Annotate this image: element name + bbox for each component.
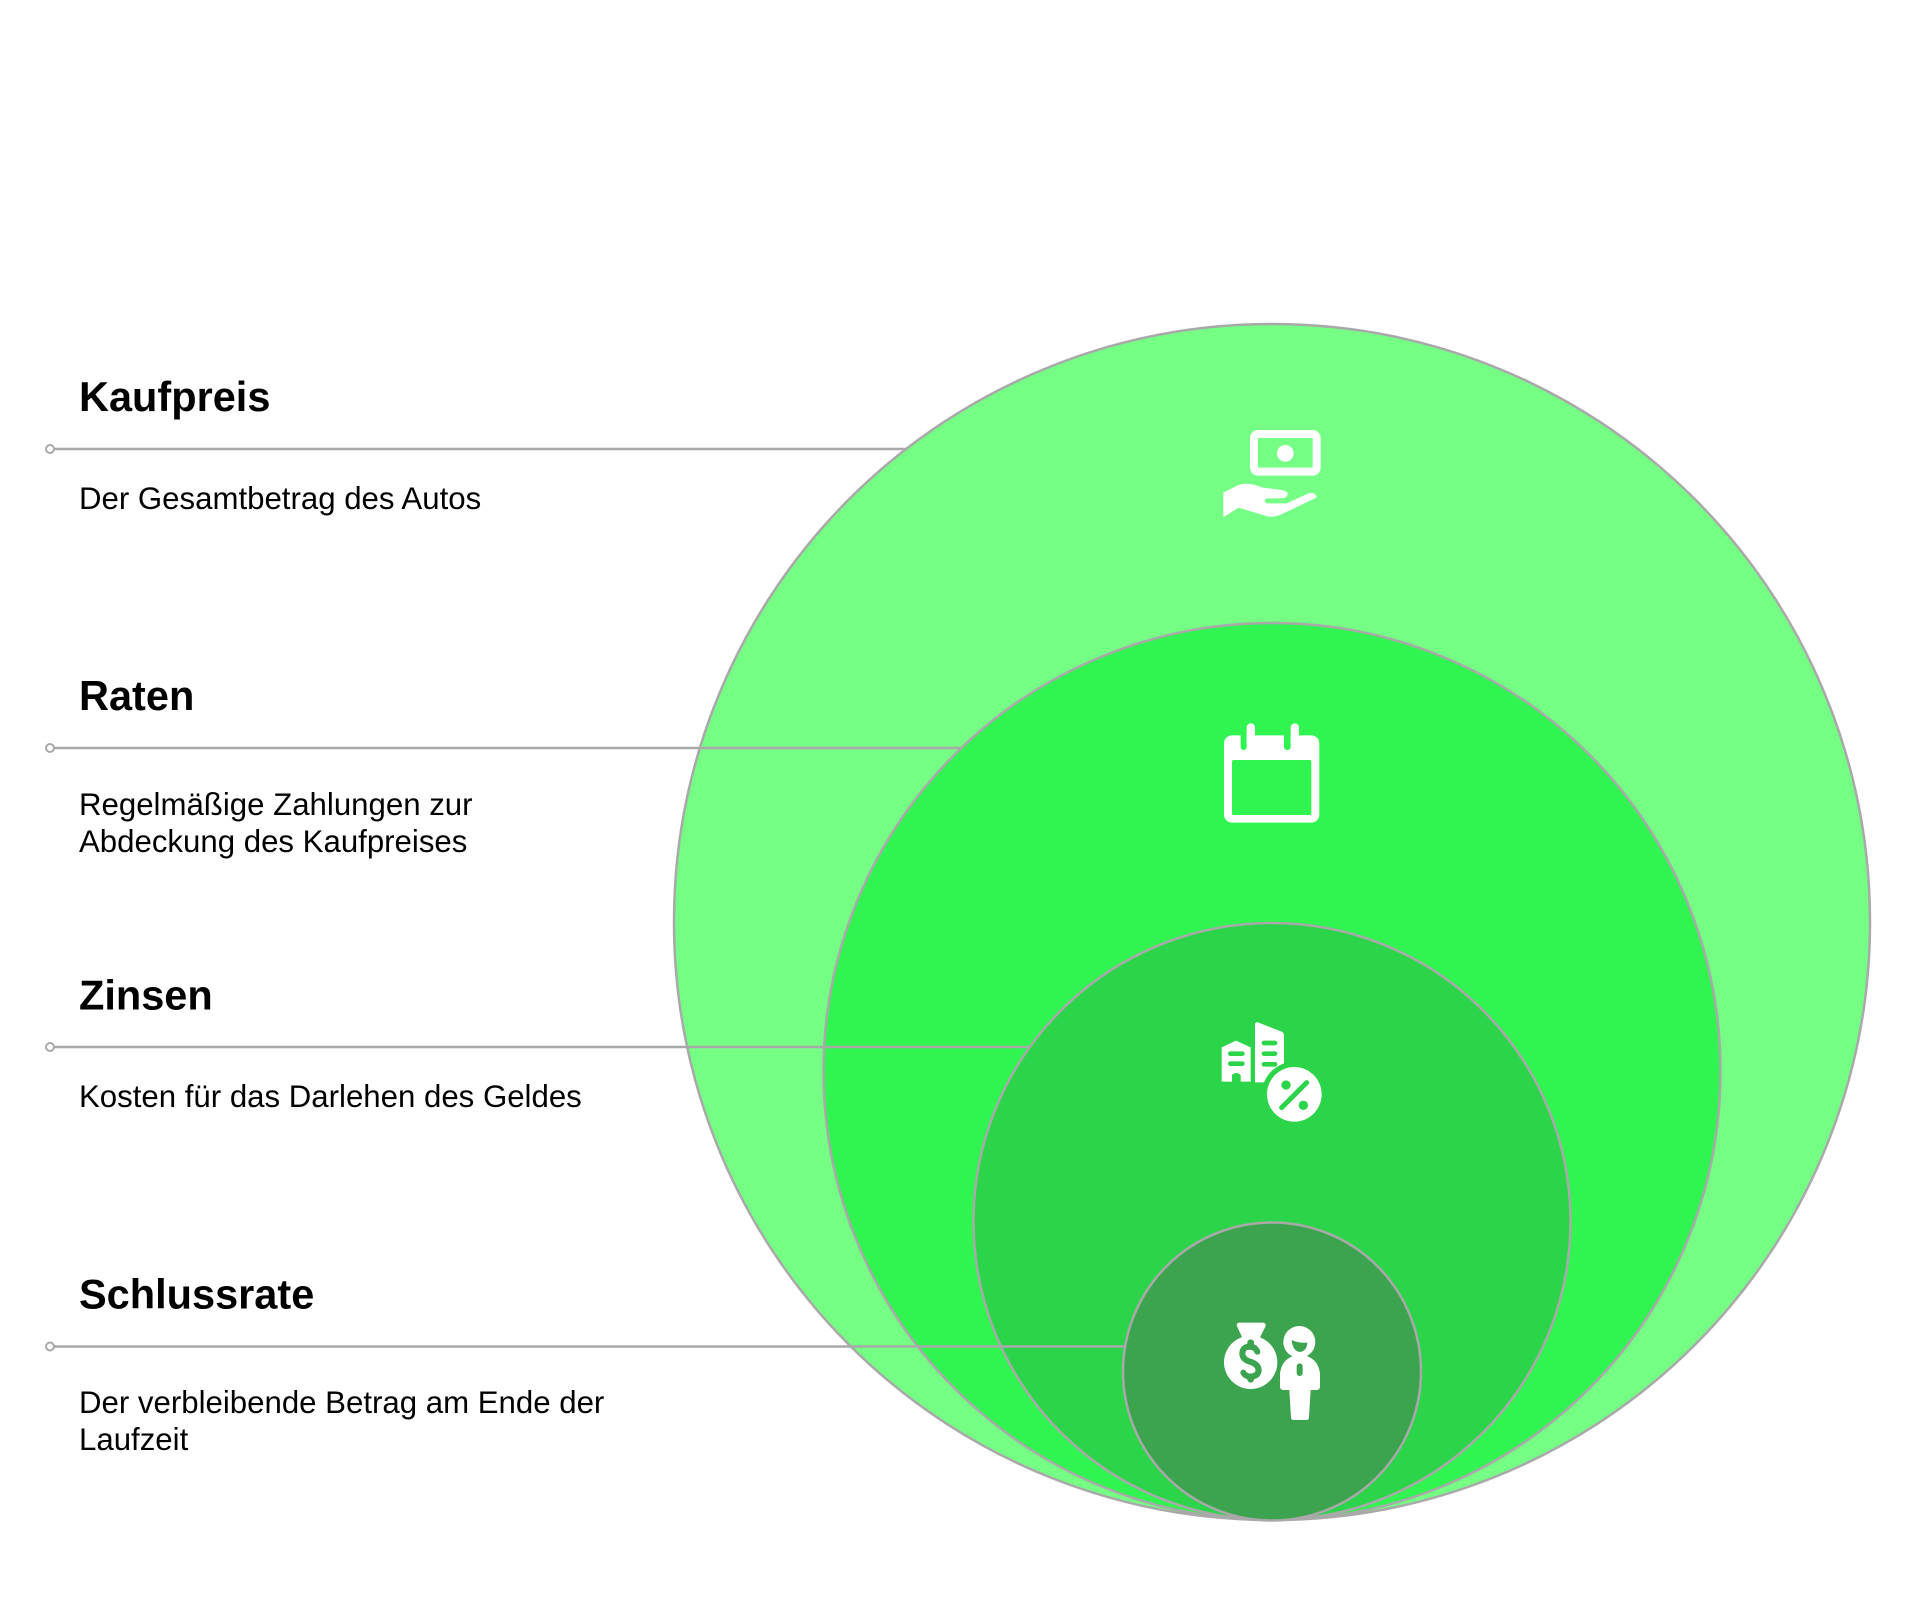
text: Raten description: Abdeckung des Kaufpreises <box>79 824 467 859</box>
circle: Raten <box>824 623 1720 1520</box>
text: Kaufpreis description: Der Gesamtbetrag des Autos <box>79 481 481 516</box>
text: Zinsen description: Kosten für das Darlehen des Geldes <box>79 1079 582 1114</box>
connector: Schlussrate <box>46 1342 1124 1350</box>
heading: Kaufpreis: Kaufpreis <box>79 373 270 420</box>
heading: Schlussrate: Schlussrate <box>79 1270 314 1318</box>
icon: hand holding money <box>1223 434 1317 517</box>
connector: Raten <box>46 744 961 752</box>
icon: money bag and person <box>1224 1323 1320 1420</box>
connector: Kaufpreis <box>46 445 906 453</box>
circle: Zinsen <box>974 923 1570 1520</box>
circle: Kaufpreis <box>674 324 1870 1520</box>
heading: Raten: Raten <box>79 672 194 719</box>
text: Schlussrate description: Der verbleibende Betrag am Ende der <box>79 1385 604 1420</box>
connector: Zinsen <box>46 1043 1030 1051</box>
circle: Schlussrate <box>1123 1222 1421 1520</box>
icon: buildings with percent <box>1222 1022 1322 1122</box>
text: Raten description: Regelmäßige Zahlungen zur <box>79 787 473 822</box>
icon: calendar <box>1224 723 1319 823</box>
nested circles <box>674 324 1870 1520</box>
heading: Zinsen: Zinsen <box>79 972 213 1018</box>
text: Schlussrate description: Laufzeit <box>79 1422 189 1457</box>
